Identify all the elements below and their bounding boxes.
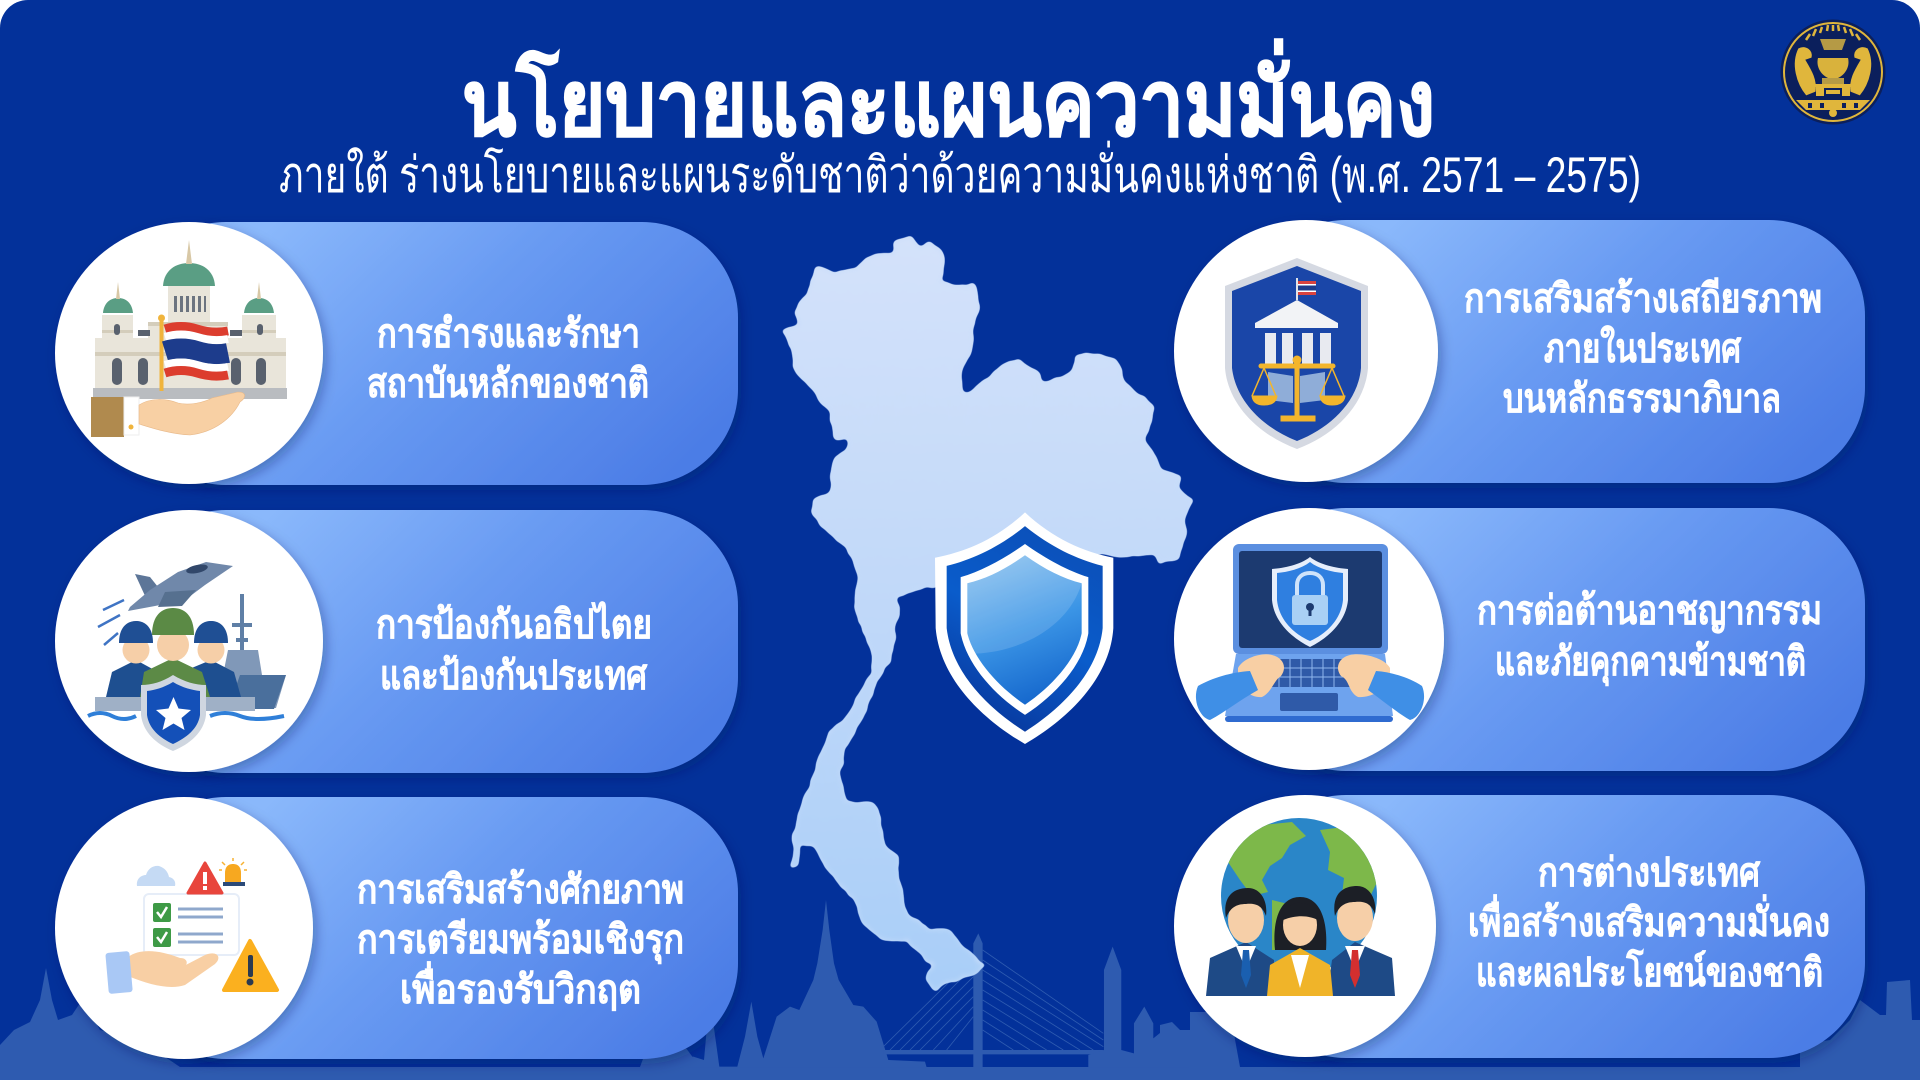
text: right 2: และภัยคุกคามข้ามชาติ: [1495, 640, 1806, 687]
icon: government seal: [1780, 20, 1886, 124]
text: left 2: และป้องกันประเทศ: [380, 654, 647, 698]
text: left 1: การธำรงและรักษา: [377, 312, 640, 356]
panel: right 3: [1174, 795, 1865, 1058]
text: right 3: การต่างประเทศ: [1538, 851, 1761, 895]
icon: checklist and warnings: [105, 858, 277, 994]
text: right 1: การเสริมสร้างเสถียรภาพ: [1464, 277, 1822, 321]
icon: laptop with shield lock: [1196, 544, 1424, 722]
text: left 3: การเสริมสร้างศักยภาพ: [357, 868, 684, 912]
panel: left 2: [55, 510, 738, 773]
skyline silhouette: [0, 900, 1920, 1080]
text: left 2: [376, 601, 652, 698]
text: left 3: เพื่อรองรับวิกฤต: [400, 961, 641, 1012]
icon: parliament building and hand: [91, 240, 287, 437]
text: right 1: บนหลักธรรมาภิบาล: [1503, 377, 1781, 421]
icon: military: [88, 562, 286, 751]
text: right 3: [1468, 851, 1830, 995]
text: left 1: สถาบันหลักของชาติ: [367, 362, 649, 406]
title: นโยบายและแผนความมั่นคง: [462, 38, 1435, 155]
text: right 2: การต่อต้านอาชญากรรม: [1477, 589, 1822, 634]
central shield: [935, 512, 1113, 744]
text: right 3: เพื่อสร้างเสริมความมั่นคง: [1468, 894, 1830, 945]
text: right 1: [1464, 277, 1822, 421]
text: left 3: การเตรียมพร้อมเชิงรุก: [357, 918, 684, 965]
text: right 1: ภายในประเทศ: [1544, 325, 1741, 371]
panel: left 1: [55, 222, 738, 485]
icon: globe and diplomats: [1206, 818, 1395, 996]
panel: right 2: [1174, 508, 1865, 771]
panel: left 3: [55, 797, 738, 1059]
icon: justice shield: [1225, 258, 1368, 449]
text: left 2: การป้องกันอธิปไตย: [376, 601, 652, 647]
thailand map: [782, 236, 1193, 989]
panel: right 1: [1174, 220, 1865, 483]
text: left 3: [357, 868, 684, 1012]
text: right 3: และผลประโยชน์ของชาติ: [1476, 949, 1823, 995]
text: left 1: [367, 312, 649, 406]
text: right 2: [1477, 589, 1822, 687]
